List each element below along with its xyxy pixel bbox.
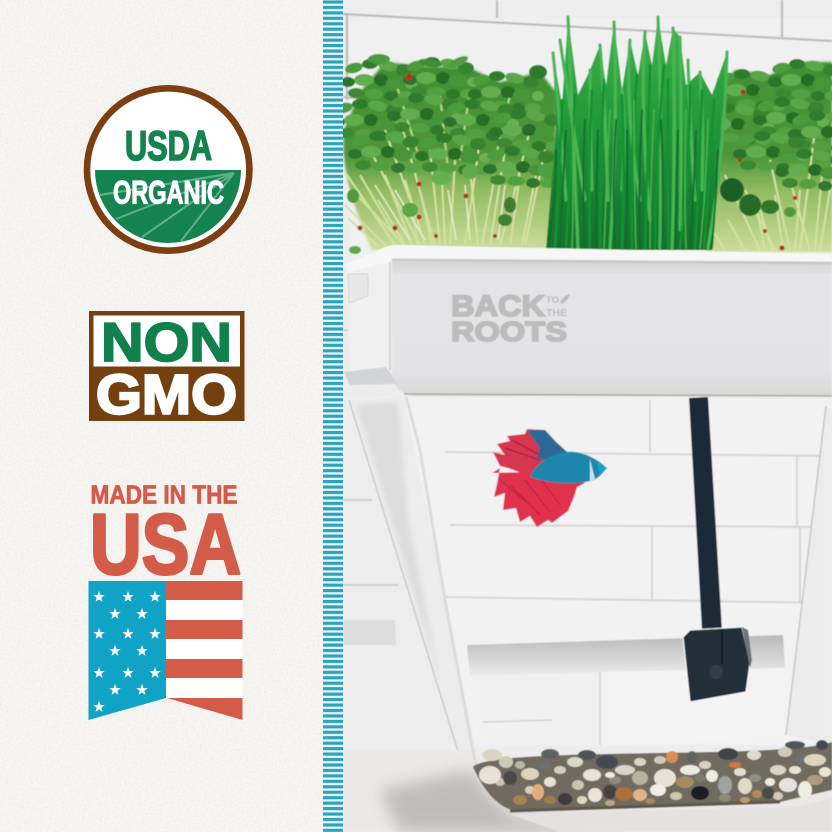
aquarium gravel <box>473 740 832 811</box>
label: NON: NON <box>101 311 232 373</box>
side panel right <box>786 405 832 745</box>
sprout tray with logo <box>344 245 832 396</box>
betta fish <box>492 429 607 527</box>
glass aquarium tank <box>348 397 832 790</box>
logo: Back to the Roots: BACK <box>451 290 545 323</box>
microgreens: left cluster <box>331 54 565 254</box>
logo: Back to the Roots: THE <box>546 308 567 319</box>
body <box>530 452 607 483</box>
logo: Back to the Roots: TO <box>546 295 559 306</box>
label: MADE IN THE: MADE IN THE <box>90 480 238 510</box>
countertop <box>343 620 832 832</box>
tail and lower fins <box>492 468 585 527</box>
panel: product photo <box>331 0 832 832</box>
wheatgrass cluster <box>546 17 727 250</box>
reflection in back glass <box>467 635 785 676</box>
aquarium pump <box>683 397 752 702</box>
flag ribbon <box>88 581 242 720</box>
label: ORGANIC: ORGANIC <box>113 174 224 210</box>
tiled kitchen wall <box>342 0 832 832</box>
badge: USDA Organic seal <box>87 88 249 251</box>
logo: Back to the Roots: ROOTS <box>451 316 567 347</box>
upper fins <box>493 429 567 476</box>
microgreens: right cluster <box>698 59 832 252</box>
stripe divider <box>323 0 343 832</box>
label: GMO: GMO <box>96 362 237 426</box>
badge: Made in the USA <box>88 480 242 720</box>
label: USA: USA <box>90 498 241 592</box>
logo: Back to the Roots <box>451 290 570 347</box>
label: USDA: USDA <box>125 122 212 169</box>
badge: Non GMO <box>89 311 244 426</box>
panel: linen background <box>0 0 324 832</box>
side panel left <box>349 398 482 790</box>
